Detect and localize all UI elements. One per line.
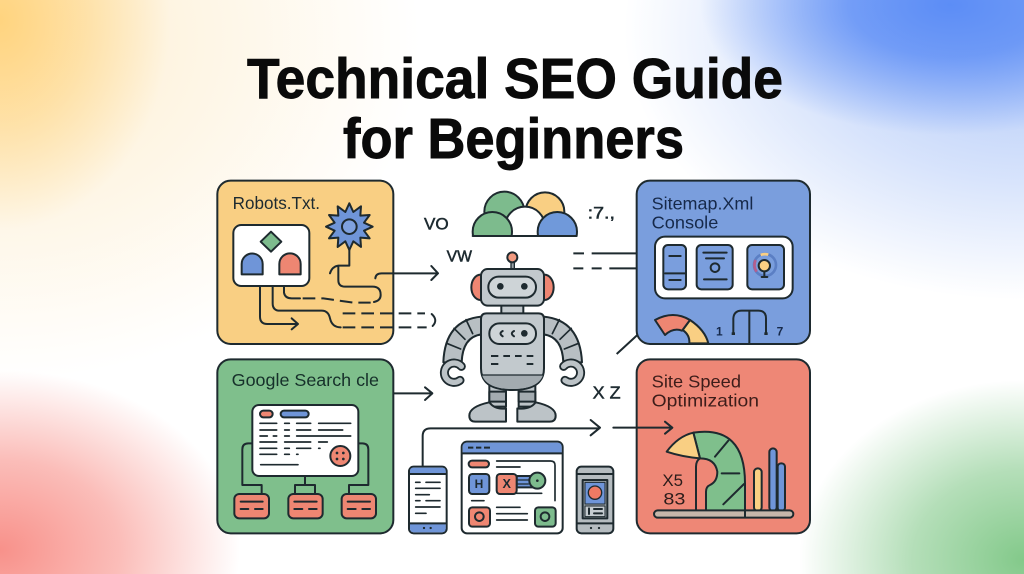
panel heading: Site Speed Optimization: Optimization <box>652 391 759 411</box>
panel heading: Sitemap.Xml Console <box>652 193 753 232</box>
robot hands <box>444 363 581 382</box>
gauge <box>655 315 708 343</box>
panel heading: Sitemap.Xml Console: Console <box>652 212 719 232</box>
robot <box>443 252 582 422</box>
title: Technical SEO Guide <box>247 47 783 111</box>
device: browser window <box>462 442 563 533</box>
window with shapes <box>233 225 309 286</box>
arrow: robots to robot <box>375 266 438 280</box>
results window <box>252 405 358 476</box>
device: tablet <box>577 467 613 533</box>
icon: cloud <box>472 190 578 237</box>
robot head <box>481 269 544 306</box>
toolbar with three tiles <box>655 237 793 298</box>
device: browser window: H <box>475 477 483 491</box>
infographic canvas <box>216 56 811 534</box>
panel: Google Search Console <box>217 359 393 533</box>
panel heading: Site Speed Optimization: Site Speed <box>652 371 741 391</box>
robot antenna <box>507 252 517 270</box>
panel heading: Robots.Txt: Robots.Txt. <box>233 193 320 213</box>
long arrow <box>423 420 600 467</box>
bracket chart <box>716 311 784 343</box>
title <box>247 47 783 171</box>
label X5 83: 83 <box>663 489 685 508</box>
robot arms <box>443 317 582 362</box>
arrow into panel <box>613 422 672 434</box>
device: browser window: X <box>502 477 511 491</box>
title: for Beginners <box>343 107 684 171</box>
bar chart <box>654 448 793 518</box>
arrow: search console to robot <box>394 387 432 400</box>
device: phone <box>409 467 447 533</box>
panel heading: Google Search: Google Search cle <box>232 370 379 390</box>
panel: Site Speed Optimization <box>613 359 810 533</box>
robot neck <box>501 305 523 314</box>
robot ears <box>471 275 554 300</box>
top labels and cloud <box>424 192 637 354</box>
bracket chart: 7 <box>777 325 784 339</box>
bracket chart: 1 <box>716 325 723 339</box>
panel: Sitemap.Xml Console <box>637 181 810 344</box>
stray label VW: VW <box>447 249 473 266</box>
stray label X Z: X Z <box>593 382 621 402</box>
panel: Robots.Txt <box>217 181 435 344</box>
connector paths <box>260 249 435 329</box>
icon: gear star <box>326 203 373 250</box>
stray label VO: VO <box>424 214 449 233</box>
label X5 83: X5 <box>662 471 683 490</box>
tree connectors <box>242 443 368 494</box>
label X5 83 <box>662 471 685 508</box>
robot legs <box>489 383 535 407</box>
panel heading: Site Speed Optimization <box>652 371 759 411</box>
speed gauge <box>667 432 745 511</box>
robot feet <box>469 402 556 422</box>
panel heading: Sitemap.Xml Console: Sitemap.Xml <box>652 193 753 213</box>
bottom connector arrow and devices <box>409 382 621 533</box>
server boxes <box>234 494 376 518</box>
dashed connectors to sitemap <box>573 253 637 354</box>
robot torso <box>481 313 544 390</box>
stray label 7: :7., <box>588 203 615 222</box>
